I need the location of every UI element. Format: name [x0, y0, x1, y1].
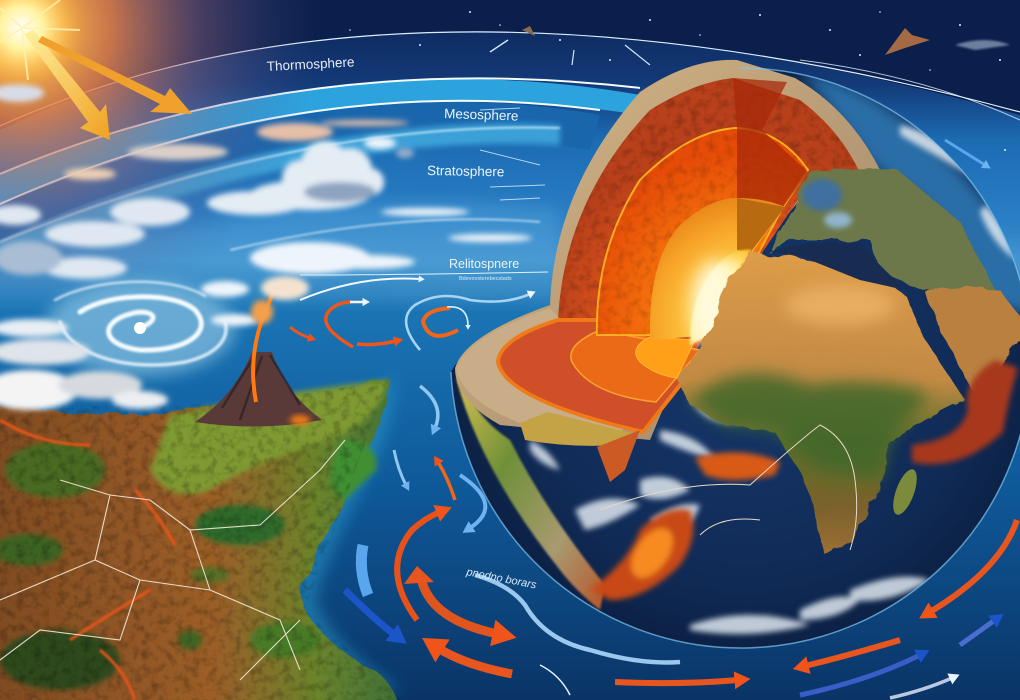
arrow: orange small left [290, 327, 310, 338]
land: continent [0, 378, 402, 700]
globe: lower crust disc [498, 320, 700, 432]
label: Stratosphere: Stratosphere [427, 163, 504, 179]
globe: inner core [690, 250, 752, 345]
arrow: blue lower 2 [960, 620, 995, 645]
sun ray arrow: right [38, 36, 192, 114]
horizon clouds [201, 137, 532, 326]
Arabia [925, 288, 1020, 395]
arrow: deep blue [345, 590, 395, 635]
atmosphere data streaks [480, 108, 545, 200]
globe: rim [451, 68, 1020, 648]
arrow: big orange rising [397, 512, 440, 620]
arrow: orange loop 1 [326, 302, 353, 347]
arrow: blue down [361, 545, 368, 595]
Black sea [824, 212, 852, 228]
arrow: globe blue top right [945, 140, 985, 165]
globe: lower disc wood [456, 308, 650, 432]
volcano [195, 276, 322, 427]
globe: lower mantle disc [571, 330, 700, 402]
label: Mesosphere: Mesosphere [444, 106, 519, 124]
arrow: pale lower [890, 678, 952, 698]
label: Thormosphere: Thormosphere [266, 54, 355, 74]
arrow: pale blue upper [420, 386, 438, 428]
arrow: globe orange right [930, 520, 1017, 612]
atmosphere bands [0, 0, 1020, 320]
globe: cloud streaks [530, 125, 1015, 634]
lava cracks and borders [0, 420, 345, 700]
lava patch lower [590, 509, 693, 600]
globe: upper right ocean [800, 70, 1020, 320]
arrow: orange wide 1 [404, 566, 498, 634]
hurricane [45, 280, 235, 376]
big cumulus [207, 141, 384, 215]
arrow: blue curve [460, 475, 485, 528]
arrow: small white [540, 665, 570, 695]
arrow: orange loop 2 [423, 308, 458, 336]
globe: crust texture [558, 78, 860, 430]
arrow: orange lower 2 [805, 640, 900, 666]
globe [440, 40, 1020, 660]
space debris and meteors [490, 26, 1010, 65]
lithosphere rule and caption: Bdevovsterebecstads [459, 276, 512, 282]
clouds [0, 84, 532, 326]
globe: crust upper [558, 78, 860, 430]
arrow: blue loop into white wave [406, 294, 530, 350]
left clouds [0, 319, 168, 410]
ocean [0, 260, 1020, 700]
Atlantic inlet [802, 179, 842, 211]
arrow: small white loop [447, 307, 468, 326]
sun glow and warm sky [0, 0, 420, 340]
globe: outer core [650, 198, 785, 340]
arrow: pale blue lower [394, 450, 406, 485]
arrow: orange lower 1 [615, 680, 738, 683]
globe: left land strip [456, 378, 605, 610]
Eurasia [768, 168, 1000, 300]
Africa: green belt [690, 373, 930, 480]
land: green regions [0, 380, 388, 690]
arrow: pale blue stream [475, 575, 680, 662]
globe: wedge block [597, 430, 640, 482]
land: texture [0, 380, 402, 700]
globe: continents [590, 168, 1020, 600]
globe: outer core shaded slice [737, 198, 785, 253]
arrow: white current sweep [300, 278, 420, 300]
globe: dark slice [733, 78, 808, 207]
Mediterranean [770, 243, 905, 290]
sun [0, 0, 84, 90]
globe: core glow [691, 260, 739, 350]
label: Relitospnere: Relitospnere [449, 257, 519, 271]
label: pnodno borars: pnodno borars [464, 566, 538, 592]
peach upper cloud [257, 120, 409, 141]
Africa: desert highlights [785, 285, 895, 325]
Africa [677, 253, 965, 555]
stars [349, 11, 1006, 151]
globe: mantle [597, 128, 808, 335]
globe: surface [440, 40, 1020, 660]
Madagascar [893, 469, 917, 515]
arrow: white tip [350, 301, 364, 303]
sun ray arrow: left [24, 30, 110, 140]
plate boundary lines [600, 425, 857, 550]
lava patch center [695, 452, 780, 480]
globe: cut wood shell [455, 60, 880, 440]
left cumulus bank [0, 84, 228, 279]
lava swirl right [912, 360, 1018, 464]
globe: ocean [440, 40, 1020, 660]
lithosphere rule and caption [300, 272, 548, 282]
arrow: orange wiggle [438, 462, 455, 500]
globe: yellow crust block [520, 412, 635, 446]
arrow: orange short [357, 341, 396, 345]
arrow: orange wide 2 [438, 648, 512, 674]
coastal shallows [290, 370, 400, 700]
globe: lower outer core disc [636, 337, 695, 378]
globe: mantle veins [597, 128, 808, 335]
arrow: blue lower 1 [800, 655, 920, 695]
